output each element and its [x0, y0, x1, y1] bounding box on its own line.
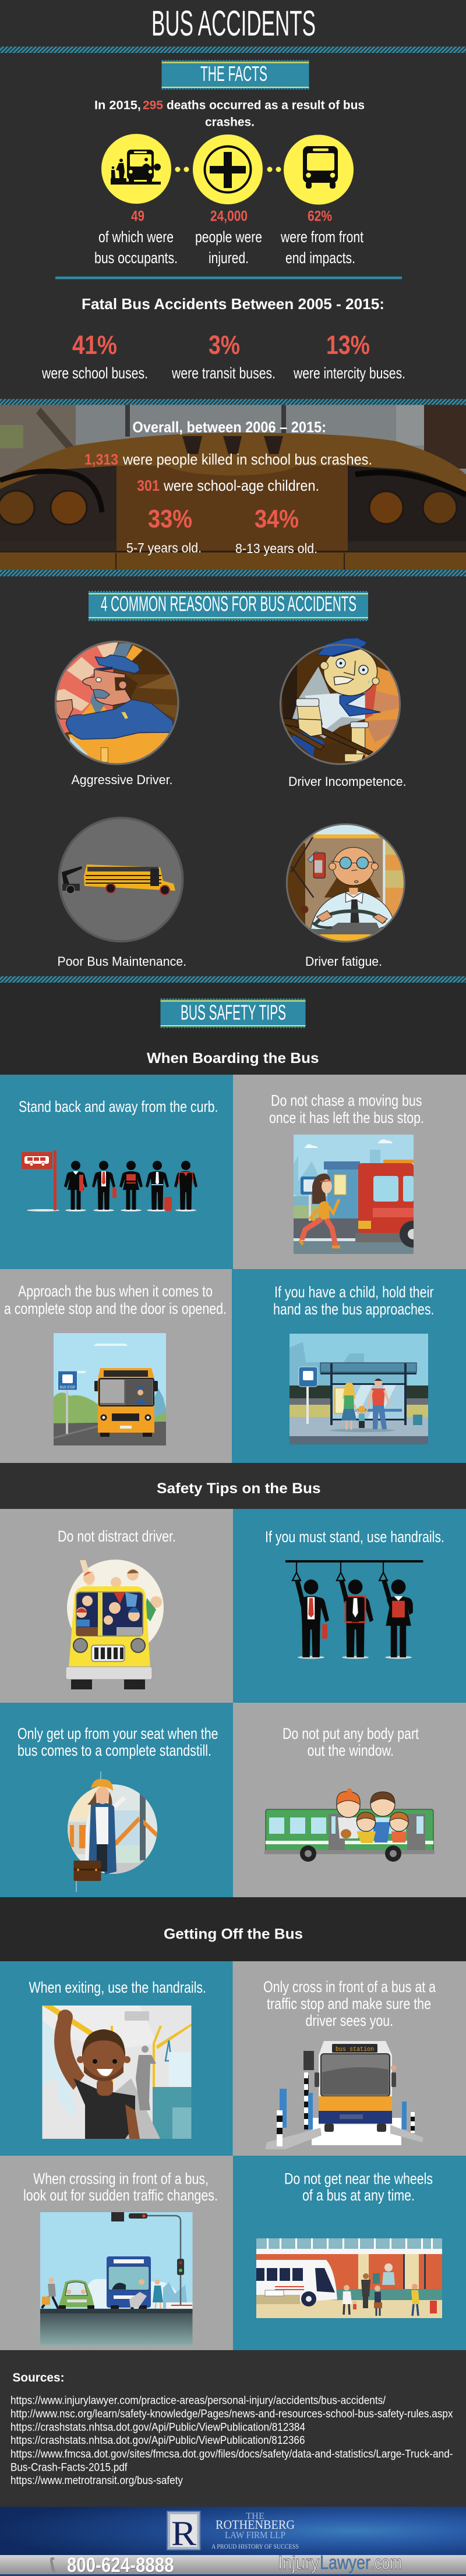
- stat: 33% aged 5-7: 33%: [148, 505, 192, 533]
- illustration: family leaning out of green bus: [264, 1788, 435, 1862]
- illustration: smiling man on bus: [42, 2005, 191, 2139]
- tip text: do not chase: [269, 1092, 424, 1126]
- panel: stay seated until standstill: [0, 1703, 233, 1897]
- label: poor bus maintenance: Poor Bus Maintenance.: [57, 954, 186, 969]
- footer: law firm logo band: R: [171, 2514, 196, 2553]
- tip text: wheels: of a bus at any time.: [302, 2187, 415, 2204]
- stat: 62% front end: 62%: [308, 208, 332, 225]
- footer: phone and website band: Lawyer: [320, 2552, 370, 2573]
- footer: law firm logo band: THE: [246, 2511, 264, 2521]
- heading banner: four reasons: [89, 591, 368, 621]
- heading banner: bus safety tips: BUS SAFETY TIPS: [181, 1000, 286, 1025]
- stat: 49 occupants: [94, 208, 178, 267]
- title: BUS ACCIDENTS: [151, 3, 316, 43]
- source links: https://www.injurylawyer.com/practice-areas/personal-injury/accidents/bus-accidents/: [10, 2394, 386, 2407]
- stat: 3% transit: 3%: [209, 330, 240, 360]
- statement: 301 children: 301: [137, 477, 160, 494]
- illustration: bus at station: bus station: [336, 2046, 374, 2053]
- stat: 24,000 injured: [195, 208, 262, 267]
- panel: do not distract driver: [0, 1509, 233, 1703]
- tip text: distract: Do not distract driver.: [58, 1528, 176, 1545]
- stat: 3% transit: were transit buses.: [171, 364, 276, 382]
- intro statement: crashes.: [205, 115, 255, 129]
- section background: boarding heading: [0, 983, 466, 1075]
- source links: [10, 2394, 453, 2487]
- stat: 13% intercity: 13%: [326, 330, 370, 360]
- statement: 301 children: were school-age children.: [163, 477, 319, 494]
- statement: 1,313 killed: 1,313: [84, 451, 118, 468]
- stat: 49 occupants: of which were: [98, 228, 174, 246]
- tip text: stand back: Stand back and away from the curb.: [19, 1098, 218, 1115]
- label: driver incompetence: Driver Incompetence.: [288, 774, 407, 789]
- heading banner: bus safety tips: [161, 999, 305, 1027]
- stat: 41% school: were school buses.: [41, 364, 148, 382]
- footer: phone and website band: 800-624-8888: [67, 2554, 174, 2576]
- stat: 13% intercity: were intercity buses.: [293, 364, 405, 382]
- statement: 1,313 killed: were people killed in school bus crashes.: [122, 451, 372, 468]
- panel: keep body inside window: [233, 1703, 466, 1897]
- stat: 33% aged 5-7: [126, 505, 202, 555]
- heading: sources: Sources:: [13, 2371, 64, 2384]
- illustration: orange bus at stop: [54, 1333, 166, 1445]
- stat: 49 occupants: 49: [131, 208, 144, 225]
- tip text: stay seated: [17, 1725, 218, 1759]
- section background: on the bus heading: [0, 1463, 466, 1509]
- heading: getting off the bus: Getting Off the Bus: [164, 1926, 303, 1942]
- illustration: crowded yellow bus: [66, 1560, 164, 1689]
- footer: phone and website band: Injury: [278, 2552, 319, 2573]
- footer: law firm logo band: LAW FIRM LLP: [225, 2529, 285, 2540]
- label: aggressive driver: Aggressive Driver.: [71, 773, 172, 787]
- tip text: crossing: [263, 1978, 436, 2029]
- stat: 34% aged 8-13: 34%: [255, 505, 299, 533]
- tip text: body part: [283, 1725, 419, 1759]
- source links: https://crashstats.nhtsa.dot.gov/Api/Public/ViewPublication/812384: [10, 2421, 305, 2433]
- stat: 13% intercity: [293, 330, 405, 382]
- panel: hold a child's hand: [232, 1269, 466, 1463]
- stat: 41% school: 41%: [72, 330, 117, 360]
- stat: 62% front end: were from front: [280, 228, 363, 246]
- panel: stand back from the curb: [0, 1075, 233, 1269]
- footer: phone and website band: .com: [370, 2552, 402, 2573]
- illustration: street crossing: [40, 2212, 192, 2345]
- stat: 49 occupants: bus occupants.: [94, 249, 178, 267]
- stat: 62% front end: [280, 208, 363, 267]
- panel: use handrails when exiting: [0, 1961, 233, 2156]
- icon: medical cross: [193, 134, 263, 204]
- connector dots: [175, 166, 189, 172]
- stat: 41% school: [41, 330, 148, 382]
- stat: 62% front end: end impacts.: [285, 249, 355, 267]
- intro statement: deaths occurred as a result of bus: [167, 99, 365, 112]
- intro statement: 295: [143, 99, 163, 112]
- tip text: stay seated: Only get up from your seat when the: [17, 1725, 218, 1742]
- heading banner: the facts: [162, 61, 309, 89]
- footer: law firm logo band: ROTHENBERG: [216, 2517, 295, 2532]
- illustration: orange bus at stop: BUS STOP: [60, 1386, 75, 1390]
- source links: Bus-Crash-Facts-2015.pdf: [10, 2461, 128, 2474]
- tip text: traffic changes: look out for sudden traffic changes.: [23, 2187, 218, 2204]
- tip text: body part: Do not put any body part: [283, 1725, 419, 1742]
- tip text: approach: [4, 1282, 227, 1317]
- stat: 24,000 injured: injured.: [209, 249, 249, 267]
- stat: 24,000 injured: people were: [195, 228, 262, 246]
- stat: 24,000 injured: 24,000: [210, 208, 248, 225]
- connector dots: [267, 166, 281, 172]
- illustration: aggressive driver: [55, 640, 179, 765]
- illustration: poor bus maintenance: [59, 818, 183, 941]
- heading: overall between 2006 - 2015: Overall, between 2006 – 2015:: [133, 419, 326, 436]
- illustration: incompetent driver: [280, 637, 401, 765]
- panel: approach the stopped bus: [0, 1269, 232, 1463]
- stat: 34% aged 8-13: [235, 505, 317, 556]
- illustration: woman standing on bus: [68, 1771, 157, 1892]
- source links: https://www.metrotransit.org/bus-safety: [10, 2475, 183, 2487]
- label: driver fatigue: Driver fatigue.: [305, 954, 382, 969]
- heading: when boarding the bus: When Boarding the Bus: [147, 1050, 319, 1066]
- illustration: woman running after bus: [294, 1135, 426, 1254]
- panel: use handrails: [233, 1509, 466, 1703]
- intro statement: In 2015,: [94, 99, 141, 112]
- photo panel: school bus rear: [0, 405, 466, 571]
- illustration: fatigued driver: [285, 823, 405, 943]
- footer: law firm logo band: [0, 2507, 466, 2555]
- illustration: bus at station: [265, 2041, 423, 2149]
- heading: safety tips on the bus: Safety Tips on the Bus: [157, 1480, 320, 1497]
- tip text: traffic changes: When crossing in front of a bus,: [33, 2170, 209, 2188]
- section background: sources: [0, 2350, 466, 2507]
- tip text: wheels: [284, 2170, 433, 2204]
- source links: https://crashstats.nhtsa.dot.gov/Api/Public/ViewPublication/812366: [10, 2435, 305, 2447]
- icon: bus front: [284, 135, 354, 205]
- heading: fatal bus accidents: Fatal Bus Accidents Between 2005 - 2015:: [82, 295, 384, 313]
- illustration: people queuing at bus stop: [22, 1150, 197, 1211]
- intro statement: [94, 99, 365, 129]
- panel: watch for traffic changes: [0, 2156, 233, 2350]
- icon: bus with passengers: [101, 134, 171, 204]
- panel: cross at traffic stop: [233, 1961, 466, 2156]
- illustration: family at bus shelter: [290, 1334, 428, 1444]
- tip text: do not chase: Do not chase a moving bus: [271, 1092, 422, 1110]
- tip text: exiting: When exiting, use the handrails.: [29, 1979, 206, 1996]
- tip text: do not chase: once it has left the bus stop.: [269, 1109, 424, 1126]
- tip text: traffic changes: [23, 2170, 218, 2204]
- tip text: crossing: driver sees you.: [305, 2012, 393, 2029]
- stat: 34% aged 8-13: 8-13 years old.: [235, 541, 317, 556]
- illustration: bus terminal: [256, 2238, 442, 2318]
- tip text: approach: Approach the bus when it comes to: [18, 1282, 213, 1300]
- section background: getting off heading: [0, 1897, 466, 1961]
- tip text: stay seated: bus comes to a complete standstill.: [17, 1742, 211, 1759]
- stat: 3% transit: [171, 330, 276, 382]
- illustration: standing passengers on handrail: [285, 1560, 423, 1659]
- panel: stay away from wheels: [233, 2156, 466, 2350]
- panel: do not chase a moving bus: [233, 1075, 466, 1269]
- tip text: body part: out the window.: [308, 1742, 394, 1759]
- tip text: approach: a complete stop and the door is opened.: [4, 1300, 227, 1317]
- heading banner: the facts: THE FACTS: [200, 62, 267, 86]
- tip text: hold hand: [273, 1283, 435, 1318]
- footer: law firm logo band: A PROUD HISTORY OF SUCCESS: [211, 2542, 299, 2550]
- footer: phone and website band: [0, 2552, 466, 2576]
- stat: 33% aged 5-7: 5-7 years old.: [126, 540, 202, 555]
